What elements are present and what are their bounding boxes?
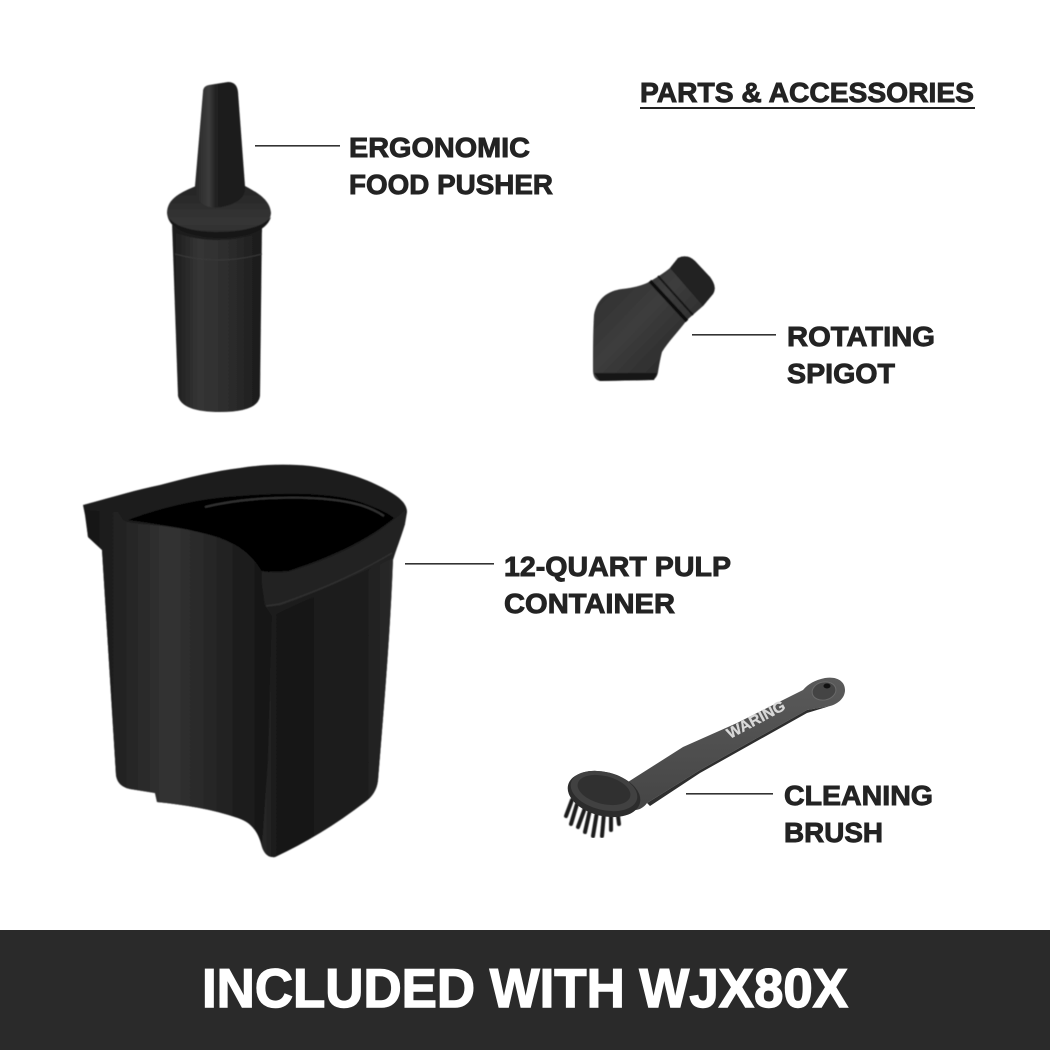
label: rotating spigot: ROTATING [787,321,935,352]
icon: pulp container [83,465,407,857]
label: rotating spigot: SPIGOT [787,358,895,389]
label: cleaning brush: CLEANING [784,780,933,811]
callout line: spigot [692,334,776,336]
label: cleaning brush [784,780,933,848]
callout line: food pusher [255,145,340,147]
callout line: brush [686,793,773,795]
label: ergonomic food pusher: FOOD PUSHER [349,169,553,200]
container left front wall [85,510,272,847]
label: 12-quart pulp container [504,551,731,619]
icon: rotating spigot [593,256,715,381]
label: rotating spigot [787,321,935,389]
brush head [563,764,645,824]
icon: cleaning brush [563,678,845,836]
container silhouette [83,465,407,857]
label: 12-quart pulp container: CONTAINER [504,588,675,619]
label: ergonomic food pusher: ERGONOMIC [349,132,530,163]
container rim band [262,510,405,607]
container interior [128,494,394,572]
handle [628,678,845,810]
heading: parts and accessories: PARTS & ACCESSORIES [640,77,974,108]
hanging hole [810,680,838,702]
banner: included with WJX80X: INCLUDED WITH WJX80X [202,957,848,1019]
label: cleaning brush: BRUSH [784,817,883,848]
banner: included with WJX80X [0,930,1050,1050]
bristles [566,800,619,836]
icon: ergonomic food pusher [167,82,271,412]
label: ergonomic food pusher [349,132,553,200]
container right side wall [262,558,393,857]
label: 12-quart pulp container: 12-QUART PULP [504,551,731,582]
brand text: WARING [724,697,788,743]
callout line: pulp container [405,563,494,565]
